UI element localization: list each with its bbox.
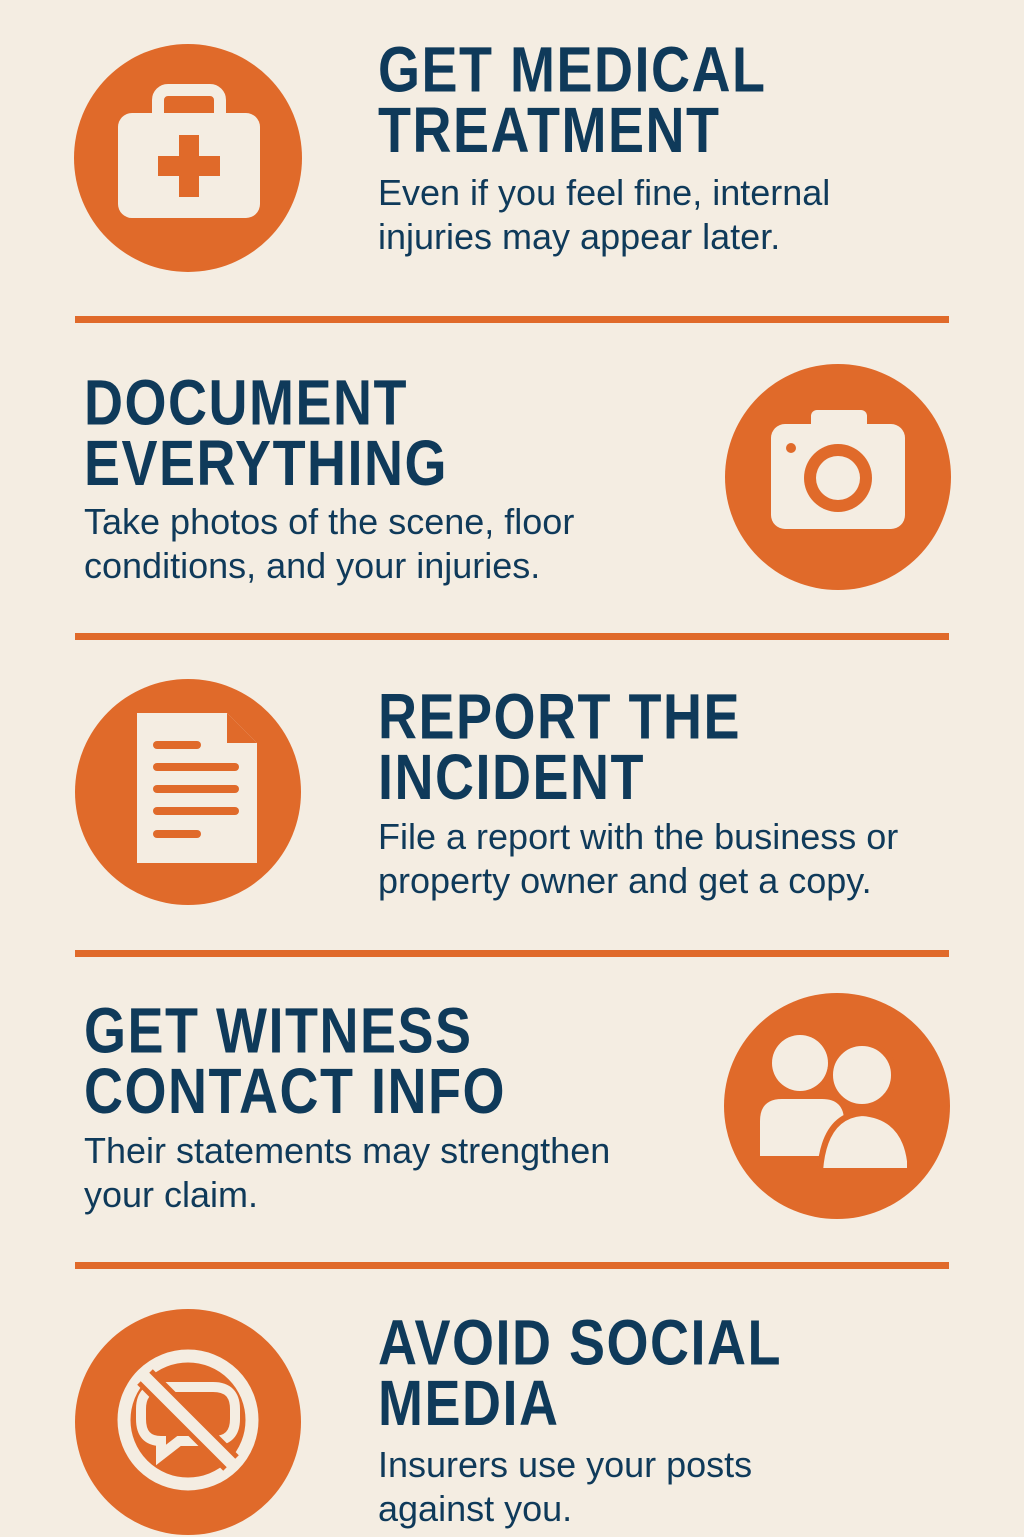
text: conditions, and your injuries. [84, 545, 540, 586]
panel: social media [75, 1308, 782, 1535]
heading: CONTACT INFO [84, 1056, 506, 1127]
text: Even if you feel fine, internal [378, 172, 830, 213]
panel: document [84, 364, 951, 590]
heading [84, 368, 448, 499]
heading [378, 1308, 782, 1439]
icon: no social media [75, 1309, 301, 1535]
text: Their statements may strengthen [84, 1130, 610, 1171]
heading [378, 35, 766, 166]
text [378, 1444, 752, 1529]
heading: EVERYTHING [84, 428, 448, 499]
panel: witness [84, 993, 950, 1219]
heading [378, 682, 741, 813]
text: injuries may appear later. [378, 216, 780, 257]
text: property owner and get a copy. [378, 860, 872, 901]
text: your claim. [84, 1174, 258, 1215]
icon: document [75, 679, 301, 905]
heading: MEDIA [378, 1368, 560, 1439]
icon: medical kit [74, 44, 302, 272]
text: against you. [378, 1488, 572, 1529]
panel: report [75, 679, 898, 905]
icon: people [724, 993, 950, 1219]
text [378, 816, 898, 901]
text: File a report with the business or [378, 816, 898, 857]
text [84, 501, 574, 586]
heading: TREATMENT [378, 95, 720, 166]
heading: REPORT THE [378, 682, 741, 753]
icon: camera [725, 364, 951, 590]
text [378, 172, 830, 257]
heading: DOCUMENT [84, 368, 408, 439]
text: Take photos of the scene, floor [84, 501, 574, 542]
text [84, 1130, 610, 1215]
heading: AVOID SOCIAL [378, 1308, 782, 1379]
heading: GET WITNESS [84, 996, 473, 1067]
heading: GET MEDICAL [378, 35, 766, 106]
panel: medical [74, 35, 830, 272]
heading [84, 996, 506, 1127]
heading: INCIDENT [378, 742, 645, 813]
text: Insurers use your posts [378, 1444, 752, 1485]
